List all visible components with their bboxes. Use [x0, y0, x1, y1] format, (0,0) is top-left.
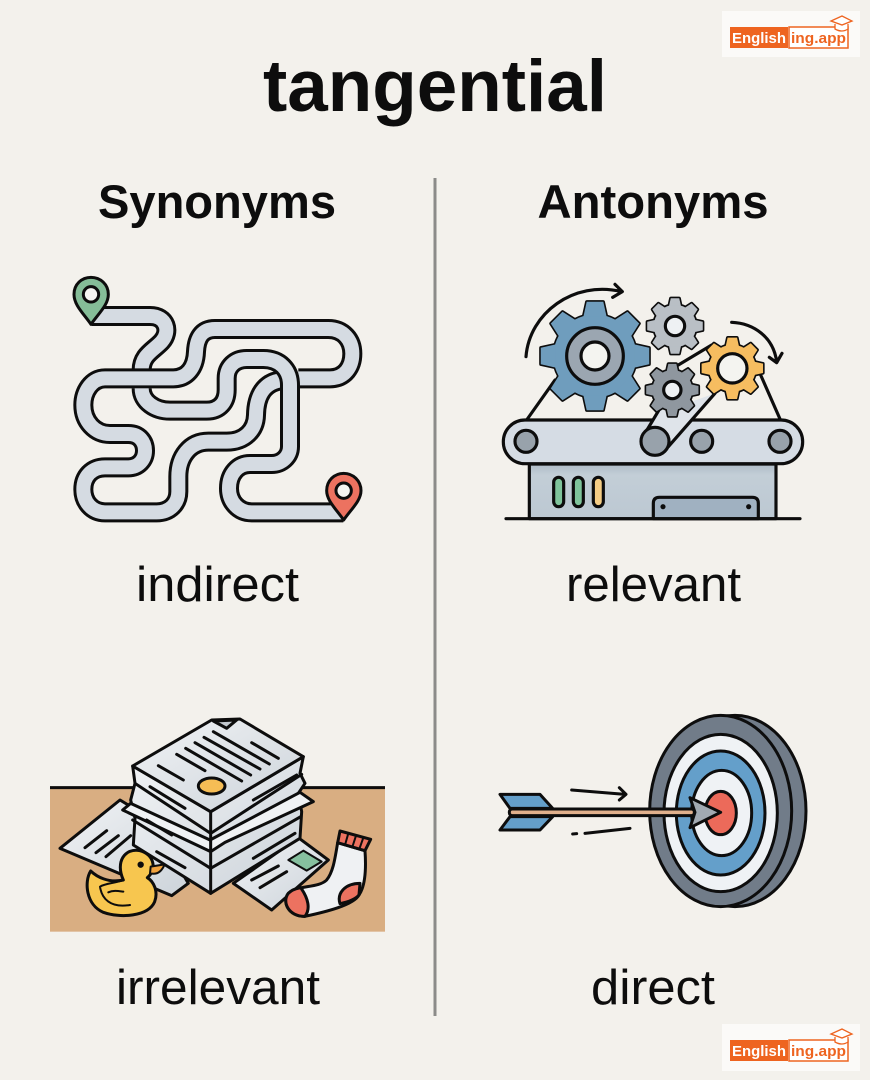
logo: top — [722, 11, 860, 57]
sock — [286, 831, 371, 916]
loose sheet: left — [60, 800, 188, 896]
gear: orange — [702, 338, 763, 399]
drive band — [643, 393, 715, 447]
target board — [650, 715, 806, 907]
label: indirect: indirect — [136, 558, 299, 612]
gear: small top grey — [647, 298, 703, 354]
logo: bottom: English — [732, 1043, 786, 1060]
pin: start — [74, 277, 108, 324]
arrow — [500, 794, 721, 830]
arrow: rotation right — [732, 322, 782, 363]
icon: target with arrow — [500, 715, 806, 907]
road segment: first section under crossing — [92, 316, 166, 380]
rollers — [515, 427, 791, 455]
arrow: rotation left — [526, 284, 622, 357]
logo: top: ing.app — [791, 30, 846, 47]
logo: bottom — [722, 1024, 860, 1071]
logo: bottom: ing.app — [791, 1043, 846, 1060]
gear: large blue — [541, 302, 649, 410]
support lines — [527, 375, 780, 419]
heading: antonyms: Antonyms — [538, 175, 768, 228]
conveyor belt — [503, 420, 803, 464]
pin: end — [327, 473, 361, 520]
label: direct: direct — [591, 961, 715, 1015]
road segment: long loop — [83, 329, 352, 512]
machine base — [529, 464, 776, 519]
loose sheet: right — [233, 838, 328, 910]
icon: paper stack with duck and sock — [50, 719, 385, 932]
access plate — [653, 497, 758, 519]
label: irrelevant: irrelevant — [116, 961, 320, 1015]
top sheet — [133, 719, 303, 812]
center divider — [434, 178, 436, 1016]
status lights — [554, 477, 603, 507]
road segment: final section — [142, 359, 343, 512]
icon: conveyor machine with gears — [503, 284, 803, 519]
logo: top: English — [732, 30, 786, 47]
heading: synonyms: Synonyms — [98, 175, 336, 228]
label: relevant: relevant — [566, 558, 741, 612]
rubber duck — [87, 850, 165, 916]
table — [50, 788, 385, 932]
gear: small middle grey — [646, 364, 698, 416]
icon: winding road — [74, 277, 361, 520]
paper stack — [123, 757, 313, 893]
motion lines — [572, 788, 630, 834]
title: tangential — [263, 46, 607, 127]
ground line — [506, 514, 800, 523]
